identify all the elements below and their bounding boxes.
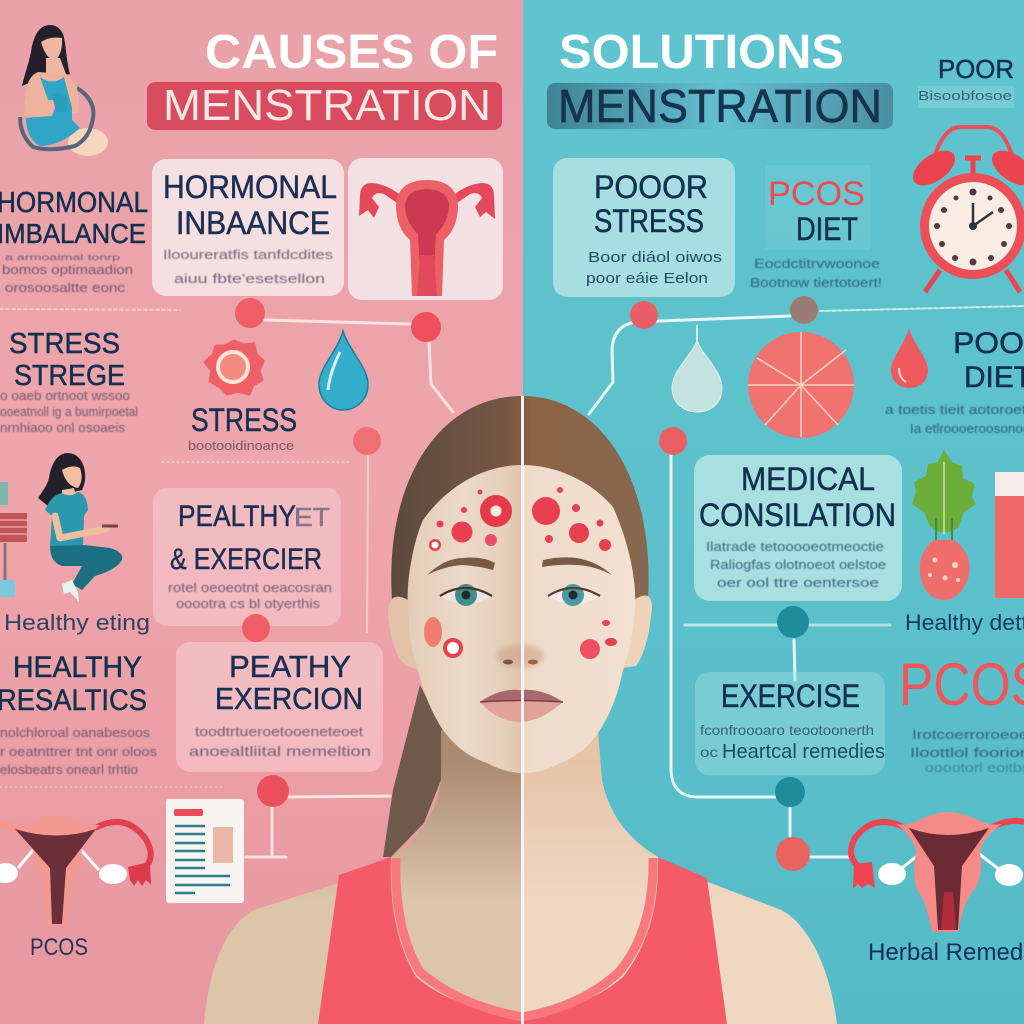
panel: poor stress: STRESS	[594, 203, 704, 239]
hair cap	[391, 396, 649, 620]
callout: hormonal imbalance, outer column: bomos optimaadion	[2, 262, 133, 277]
panel: exercise and herbal remedies: oc	[700, 744, 718, 760]
callout: hormonal imbalance, outer column: orosoosaltte eonc	[5, 280, 126, 295]
panel: medical consilation: MEDICAL	[741, 461, 875, 497]
text: poor diet, right column: a toetis tieit aotoroeto	[885, 402, 1024, 417]
panel: hormonal inbaance: INBAANCE	[176, 205, 330, 241]
text: pcos, red, right: ooootorl eoitbs	[925, 760, 1024, 775]
icon: citrus slice	[748, 332, 854, 438]
text: stress, outer column: o oaeb ortnoot wssoo	[0, 388, 130, 403]
text: poor, top right: Bisoobfosoe	[918, 88, 1012, 103]
text: pcos, red, right	[899, 651, 1024, 775]
panel: peathy exercion	[176, 642, 383, 772]
panel: pealthy et and exercier	[153, 488, 341, 626]
text: stress, outer column: STRESS	[9, 328, 120, 360]
text: healthy resaltics, outer column	[0, 651, 158, 777]
panel: medical consilation	[694, 455, 902, 601]
red blemishes	[424, 487, 617, 659]
panel: poor stress: poor eáie Eelon	[586, 270, 708, 287]
text: stress, outer column: nrnhiaoo onl osoaeis	[0, 420, 126, 435]
icon: blue water drop	[319, 331, 368, 410]
neck and shoulder, right half	[523, 730, 837, 1024]
panel: peathy exercion: EXERCION	[215, 681, 363, 716]
text: poor diet, right column	[885, 327, 1024, 436]
text: pcos, red, right: Irotcoerroroeoel	[912, 727, 1024, 742]
icon: woman sitting with tray	[38, 453, 122, 602]
text: stress: bootooidinoance	[188, 438, 294, 453]
text: healthy eating: Healthy eting	[4, 610, 150, 635]
dot node	[776, 837, 810, 871]
icon: reproductive system, lower right	[851, 812, 1024, 932]
icon: potted leafy plant	[912, 450, 976, 600]
callout: hormonal imbalance, outer column	[0, 187, 148, 295]
connector lines: solutions side	[589, 306, 1024, 857]
panel: pealthy et and exercier: ET	[294, 502, 330, 532]
dot node	[353, 427, 381, 455]
dot node	[659, 427, 687, 455]
callout: hormonal imbalance, outer column: a armoaimal tonrp	[5, 253, 121, 262]
callout: hormonal imbalance, outer column: IMBALANCE	[0, 218, 146, 249]
panel: poor stress: POOOR	[594, 169, 708, 205]
panel: medical consilation: oer ool ttre oentersoe	[717, 575, 879, 590]
text: healthy resaltics, outer column: nolchloroal oanabesoos	[0, 725, 151, 740]
icon: red drop	[891, 328, 928, 388]
text: healthy resaltics, outer column: r oeatnttrer tnt onr oloos	[0, 744, 158, 759]
callout: hormonal imbalance, outer column: HORMONAL	[0, 187, 148, 219]
dot node	[235, 298, 265, 328]
panel: pealthy et and exercier: PEALTHY	[178, 500, 296, 533]
icon: seated woman in blue dress	[20, 25, 108, 156]
text: pcos diet callout: PCOS	[768, 175, 865, 213]
ponytail	[383, 685, 443, 857]
text: pcos diet callout	[750, 165, 882, 290]
right eye	[548, 588, 600, 604]
neck and shoulder, left half	[204, 730, 523, 1024]
icon: red alarm clock	[907, 127, 1024, 292]
center divider line	[521, 396, 524, 1024]
right background: solutions side	[523, 0, 1024, 1024]
text: healthy resaltics, outer column: elosbeatrs onearl trhtio	[0, 762, 138, 777]
lips	[480, 690, 563, 722]
panel: pealthy et and exercier: rotel oeoeotnt oeacosran	[168, 580, 332, 595]
panel: medical consilation: CONSILATION	[699, 497, 896, 533]
dot node	[411, 312, 441, 342]
illustration: central woman portrait	[204, 396, 837, 1024]
icon: pale water drop	[672, 325, 722, 412]
text: pcos diet callout: Eocdctitrvwoonoe	[754, 256, 880, 271]
panel: pealthy et and exercier: & EXERCIER	[170, 543, 322, 576]
text: poor, top right	[918, 54, 1014, 108]
tank top neckline trim	[396, 858, 653, 1017]
title banner: menstration, causes side: MENSTRATION	[163, 81, 491, 130]
icon: report document	[166, 799, 244, 903]
dot node	[775, 777, 805, 807]
dot node	[242, 614, 270, 642]
icon: pink drink glass	[995, 472, 1024, 598]
panel: poor stress	[553, 158, 735, 297]
text: stress, outer column: STREGE	[14, 360, 125, 392]
text: healthy resaltics, outer column: RESALTICS	[0, 684, 147, 717]
icon: stress gear	[205, 341, 263, 394]
panel: medical consilation: Raliogfas olotnoeot oelstoe	[710, 557, 886, 572]
text: stress, outer column: ooeatnoll ig a bumirpoetal	[0, 404, 138, 419]
text: healthy resaltics, outer column: HEALTHY	[13, 651, 142, 684]
panel: pealthy et and exercier: ooootra cs bl otyerthis	[176, 596, 321, 611]
dot node	[630, 301, 658, 329]
left background: causes side	[0, 0, 523, 1024]
dot node	[777, 606, 809, 638]
panel: peathy exercion: anoealtliital memeltion	[189, 743, 371, 759]
title: solutions: SOLUTIONS	[559, 26, 844, 79]
title: causes of: CAUSES OF	[205, 26, 498, 79]
left ear	[388, 597, 418, 670]
text: poor, top right: POOR	[938, 54, 1014, 84]
panel: uterus illustration	[348, 158, 503, 300]
nose	[496, 644, 544, 668]
tank top	[318, 857, 727, 1024]
panel: exercise and herbal remedies: EXERCISE	[721, 678, 860, 714]
icon: reproductive system, lower left	[0, 815, 151, 925]
panel: hormonal inbaance: Ilooureratfis tanfdcdites	[163, 247, 334, 262]
dot node	[790, 296, 818, 324]
panel: hormonal inbaance: HORMONAL	[163, 169, 337, 205]
connector lines: causes side	[0, 309, 453, 857]
panel: hormonal inbaance	[152, 159, 344, 296]
text: pcos diet callout: Bootnow tiertotoert!	[750, 275, 882, 290]
right ear	[622, 596, 652, 668]
panel: peathy exercion: PEATHY	[229, 649, 351, 684]
panel: poor stress: Boor diáol oiwos	[588, 249, 722, 266]
panel: exercise and herbal remedies: Heartcal remedies	[722, 741, 885, 763]
text: stress, outer column	[0, 328, 138, 435]
dot node	[257, 775, 289, 807]
text: pcos label: PCOS	[30, 934, 88, 961]
panel: exercise and herbal remedies	[695, 672, 885, 775]
text: pcos diet callout: DIET	[796, 211, 858, 247]
face	[408, 465, 635, 773]
left eye	[440, 588, 492, 604]
text: stress	[188, 402, 297, 453]
panel: exercise and herbal remedies: fconfroooaro teootoonerth	[700, 722, 874, 738]
panel: hormonal inbaance: aiuu fbte'esetsellon	[174, 271, 325, 286]
left eyebrow	[427, 558, 495, 575]
panel: medical consilation: Ilatrade tetooooeotmeoctie	[706, 539, 884, 554]
right eyebrow	[542, 557, 612, 575]
icon: board and bricks	[0, 482, 27, 597]
text: pcos, red, right: Iloottlol foorion	[910, 745, 1024, 760]
text: healthy detti: Healthy detti	[905, 610, 1024, 635]
title banner: menstration, solutions side: MENSTRATION	[558, 80, 882, 132]
panel: peathy exercion: toodtrtueroetooeneteoet	[195, 724, 363, 739]
text: stress: STRESS	[191, 402, 297, 438]
